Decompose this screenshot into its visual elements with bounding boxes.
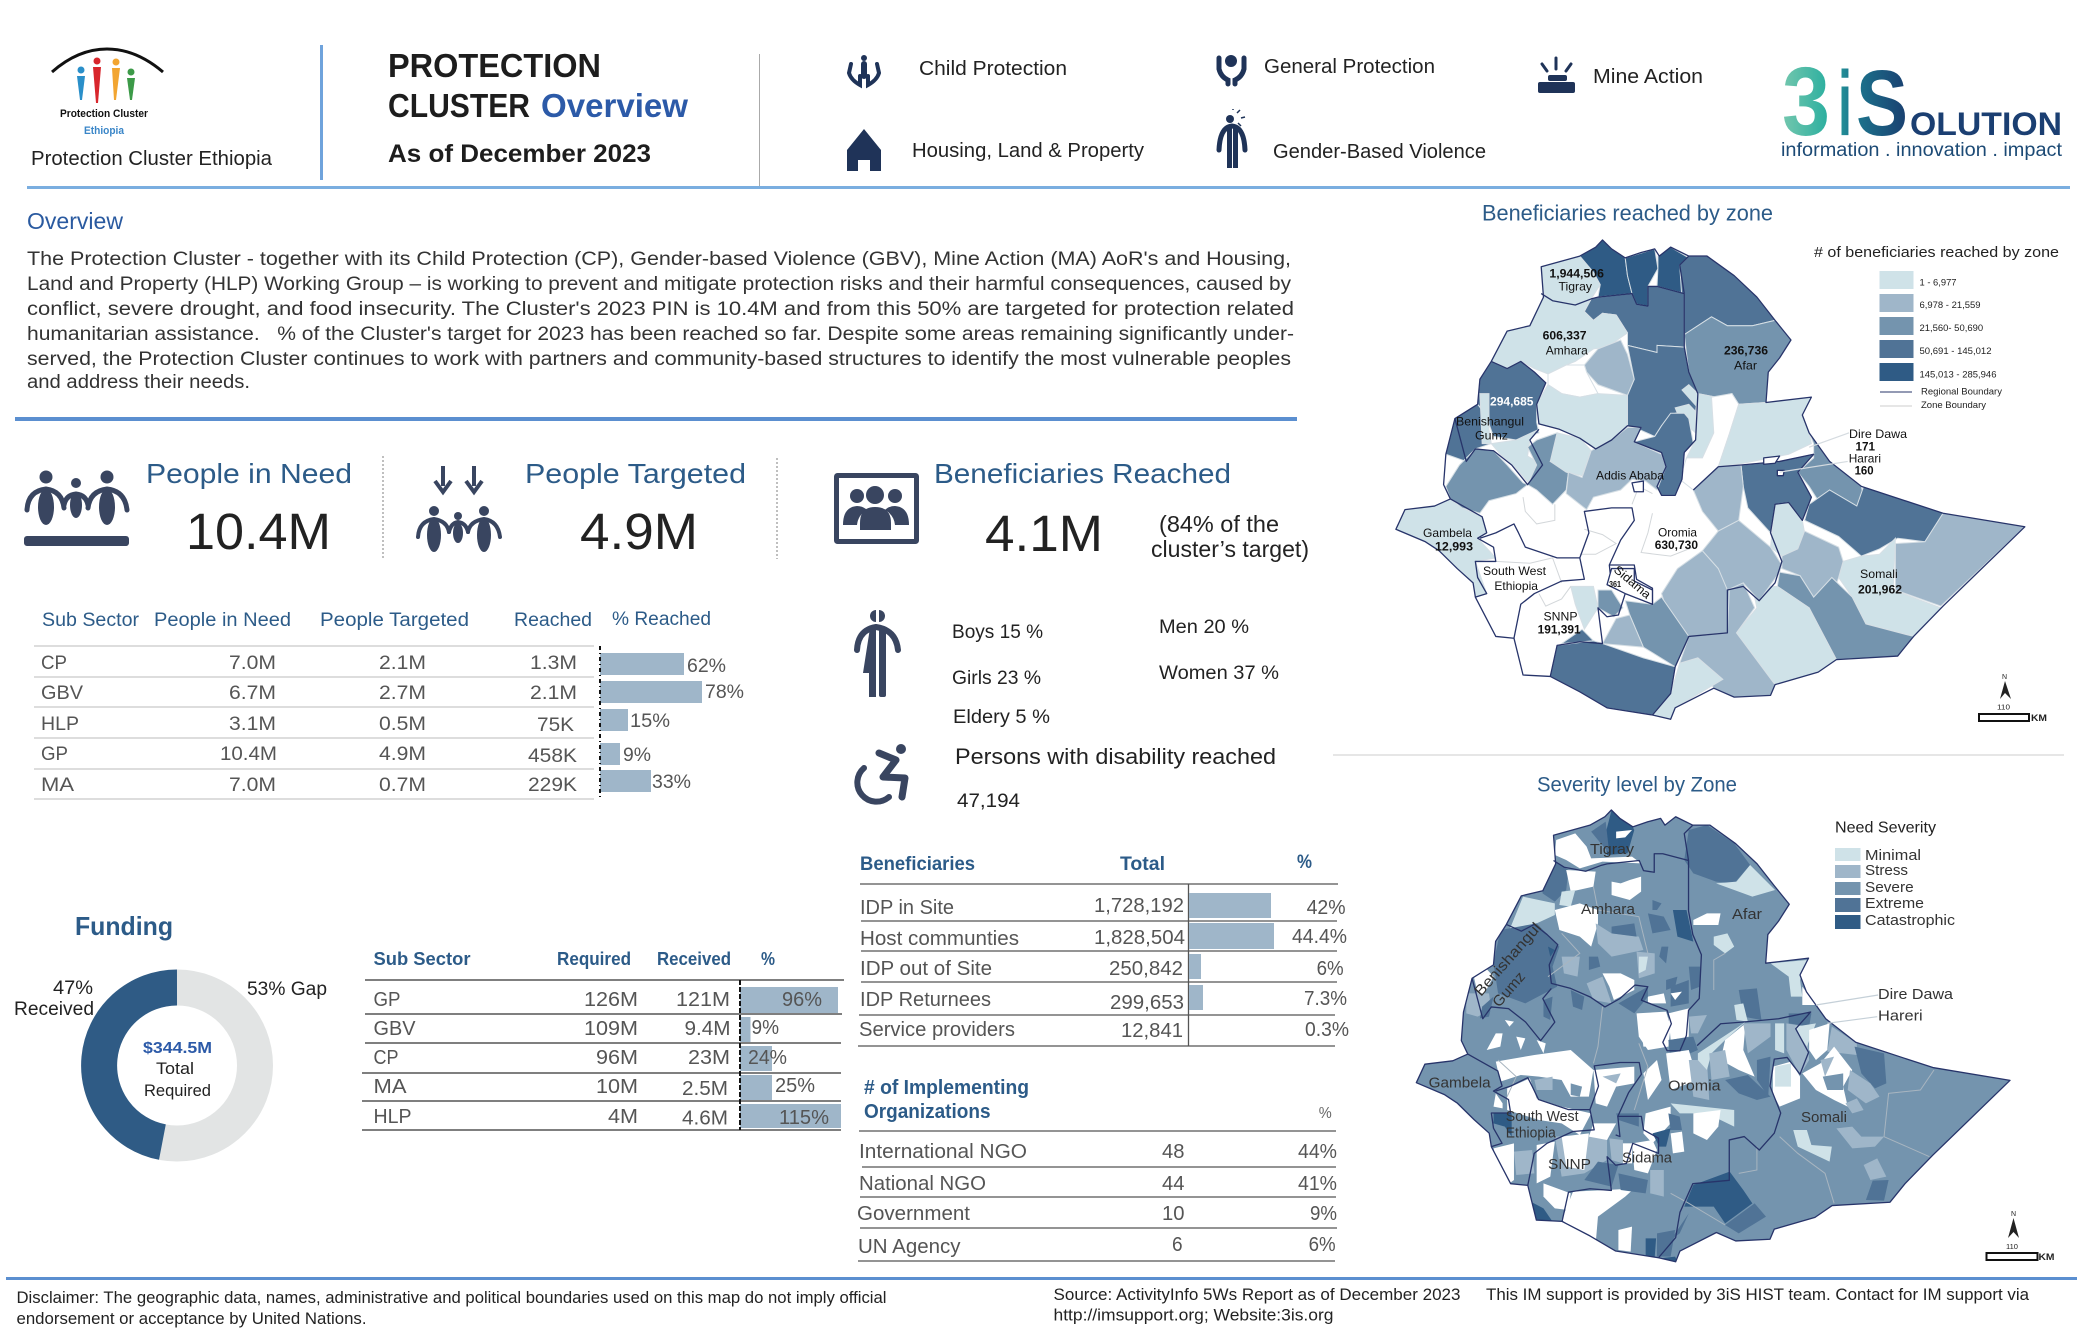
logo caption: Protection Cluster Ethiopia [31, 148, 273, 170]
rows: MA [41, 775, 74, 796]
icon: people targeted [418, 466, 500, 552]
map labels: Harari [1849, 452, 1881, 466]
map labels [1429, 841, 1954, 1173]
map labels: Amhara [1546, 343, 1588, 357]
map legend: 21,560- 50,690 [1920, 323, 1983, 333]
map labels: Gambela [1423, 526, 1472, 540]
map labels: Tigray [1558, 280, 1592, 294]
header row: Beneficiaries [860, 854, 975, 875]
map legend: 50,691 - 145,012 [1920, 346, 1992, 356]
rows: 10M [596, 1076, 638, 1098]
rows: 109M [584, 1018, 638, 1040]
scale bar and north arrow: KM [2038, 1252, 2054, 1262]
icon: people in need [24, 470, 129, 546]
footer [6, 1277, 2077, 1328]
icon: gender figure [857, 610, 898, 697]
overview paragraph: humanitarian assistance. % of the Cluster's target for 2023 has been reached so far. Despite some areas remaining significantly under- [27, 324, 1294, 345]
title: CLUSTER [388, 87, 530, 124]
map labels: 606,337 [1543, 328, 1587, 342]
header: # of Implementing [864, 1077, 1029, 1099]
map labels: Dire Dawa [1878, 986, 1954, 1003]
header row: Received [657, 949, 731, 969]
header row: Sub Sector [374, 949, 470, 969]
rows: 48 [1162, 1141, 1184, 1163]
overview paragraph [27, 249, 1294, 393]
map labels: SNNP [1544, 609, 1578, 623]
logo: 3iS Solution: OLUTION [1910, 106, 2062, 142]
header band [27, 45, 2070, 189]
map legend [1835, 820, 1956, 929]
value: 10.4M: 10.4M [186, 503, 331, 560]
value: 4.1M: 4.1M [985, 505, 1103, 562]
disclaimer: Disclaimer: The geographic data, names, administrative and political boundaries used on this map do not imply official [16, 1289, 886, 1307]
rows: 25% [775, 1075, 815, 1097]
map labels: 1,944,506 [1549, 266, 1604, 280]
map labels: 201,962 [1858, 583, 1902, 597]
rows: 24% [748, 1047, 787, 1069]
label: Child Protection: Child Protection [919, 58, 1067, 80]
rows: 6 [1172, 1234, 1183, 1256]
note: share of target [1151, 511, 1309, 562]
rows: 75K [537, 715, 574, 736]
value: 47,194: 47,194 [957, 791, 1020, 812]
rows: 1.3M [530, 653, 577, 674]
rows: 6% [1317, 958, 1344, 980]
icon: beneficiaries frame [836, 476, 916, 542]
percent column header: % [1319, 1105, 1332, 1122]
scale bar and north arrow: KM [2031, 713, 2047, 723]
rows: 12,841 [1121, 1020, 1183, 1042]
label: Housing, Land & Property: Housing, Land & Property [912, 140, 1144, 162]
disclaimer: endorsement or acceptance by United Nations. [16, 1310, 366, 1328]
label: Mine Action: Mine Action [1593, 66, 1703, 88]
map labels: Benishangul [1456, 415, 1524, 429]
header row: People Targeted [320, 610, 469, 631]
donut chart: $344.5M [143, 1040, 212, 1057]
logo: 3iS Solution: i [1838, 53, 1852, 155]
rows: 3.1M [229, 714, 276, 735]
rows: 10.4M [220, 744, 277, 765]
map labels: Sidama [1611, 563, 1654, 602]
icon: child protection [849, 55, 879, 85]
header [864, 1077, 1029, 1123]
logo: Protection Cluster Ethiopia [52, 49, 163, 137]
rows: 0.3% [1305, 1019, 1349, 1041]
panel: severity map [1380, 774, 2061, 1277]
map legend: 6,978 - 21,559 [1920, 300, 1980, 310]
map legend: Extreme [1865, 895, 1924, 912]
rows: UN Agency [858, 1236, 960, 1258]
map labels: South West [1483, 564, 1547, 578]
map labels: Sidama [1622, 1150, 1673, 1167]
header row: Required [557, 949, 631, 969]
map legend: Zone Boundary [1921, 400, 1987, 410]
map legend: Stress [1865, 862, 1908, 879]
rows: 44% [1298, 1141, 1337, 1163]
map labels: Afar [1734, 358, 1757, 372]
bar chart: beneficiaries share [1189, 893, 1274, 1010]
rows: 9.4M [684, 1018, 730, 1040]
rows: 229K [528, 775, 577, 796]
logo: 3iS Solution: S [1856, 51, 1908, 155]
overview paragraph: conflict, severe drought, and food insecurity. The Cluster's 2023 PIN is 10.4M and from this 50% are targeted for protection related [27, 299, 1294, 320]
panel: KPI people targeted [418, 458, 746, 560]
note: share of target: cluster’s target) [1151, 536, 1309, 562]
map labels: 630,730 [1655, 538, 1698, 552]
logo: Protection Cluster Ethiopia: Ethiopia [84, 125, 125, 137]
source: Source: ActivityInfo 5Ws Report as of December 2023 [1054, 1286, 1460, 1304]
scale bar and north arrow: 110 [2006, 1244, 2018, 1251]
rows: 7.0M [229, 653, 276, 674]
heading: severity map: Severity level by Zone [1537, 774, 1737, 797]
rows: 2.1M [530, 683, 577, 704]
rows: Host communties [860, 928, 1019, 950]
scale bar and north arrow: N [2011, 1211, 2016, 1218]
overview paragraph: served, the Protection Cluster continues to work with partners and community-based structures to identify the most vulnerable peoples [27, 349, 1291, 370]
title: As of December 2023 [388, 140, 651, 168]
rows: 115% [779, 1107, 829, 1129]
map legend: Severe [1865, 879, 1914, 896]
source: http://imsupport.org; Website:3is.org [1054, 1307, 1334, 1325]
rows: 0.7M [379, 775, 426, 796]
note: share of target: (84% of the [1159, 511, 1279, 537]
header row: Sub Sector [42, 610, 140, 631]
header row: % [761, 949, 775, 969]
rows: 6% [1309, 1234, 1336, 1256]
scale bar and north arrow [1986, 1211, 2054, 1262]
bar chart: percent reached: 33% [652, 772, 691, 793]
rows: Service providers [859, 1019, 1015, 1041]
choropleth map: severity by zone [1416, 809, 2011, 1262]
donut labels [14, 978, 327, 1020]
rows: GP [41, 744, 68, 765]
map labels: 12,993 [1435, 540, 1473, 554]
logo: Protection Cluster Ethiopia: Protection Cluster [60, 108, 149, 120]
panel: demographics [857, 610, 1279, 812]
header row [374, 949, 775, 969]
bar chart: percent received [740, 980, 841, 1130]
icon: housing [847, 129, 881, 171]
map labels: Dire Dawa [1849, 427, 1907, 441]
rows: 23M [688, 1047, 730, 1069]
header row: Reached [514, 610, 592, 631]
map labels [1423, 266, 1907, 637]
icon: wheelchair [857, 744, 906, 802]
rows: 4.9M [379, 744, 426, 765]
overview paragraph: Land and Property (HLP) Working Group – is working to prevent and mitigate protection risks and their harmful consequences, caused by [27, 274, 1292, 295]
rows: MA [374, 1076, 407, 1098]
rows: 9% [1310, 1203, 1337, 1225]
rows: National NGO [859, 1173, 986, 1195]
rows: 41% [1298, 1173, 1337, 1195]
rows [857, 1141, 1337, 1258]
scale bar and north arrow: 110 [1997, 705, 2010, 712]
map labels: Hareri [1878, 1008, 1923, 1025]
choropleth map: beneficiaries by zone [1395, 239, 2026, 720]
source [1054, 1286, 1460, 1325]
rows: CP [41, 653, 67, 674]
bar chart: percent reached [600, 646, 744, 800]
logo: 3iS Solution [1781, 47, 2063, 161]
map labels: Gambela [1429, 1075, 1491, 1092]
rows: 0.5M [379, 714, 426, 735]
header row [42, 609, 711, 631]
rows: 7.0M [229, 775, 276, 796]
map labels: 171 [1856, 440, 1875, 454]
icon: gender-based violence [1219, 109, 1245, 168]
heading: people in need: People in Need [146, 458, 352, 489]
title [388, 47, 688, 168]
rows: 2.5M [682, 1078, 728, 1100]
rows: 4M [608, 1106, 638, 1128]
header row: People in Need [154, 610, 291, 631]
rows: 96M [596, 1047, 638, 1069]
scale bar and north arrow: N [2002, 674, 2007, 681]
map labels: Benishangul [1471, 919, 1545, 1000]
donut labels: 47% [53, 978, 93, 999]
map labels: Ethiopia [1506, 1125, 1556, 1142]
header: Organizations [864, 1101, 990, 1123]
value: 4.9M: 4.9M [580, 503, 698, 560]
map labels: 236,736 [1724, 343, 1768, 357]
rows: 7.3% [1304, 988, 1347, 1010]
map legend: Minimal [1865, 847, 1921, 864]
rows: HLP [374, 1106, 412, 1128]
header row: Total [1120, 854, 1165, 875]
gender breakdown: Men 20 % [1159, 617, 1249, 638]
disclaimer [16, 1289, 886, 1328]
rows: GP [374, 989, 400, 1011]
scale bar and north arrow [1979, 674, 2047, 723]
logo: 3iS Solution: 3 [1782, 47, 1830, 156]
map labels: Gumz [1475, 428, 1508, 442]
map labels: Afar [1732, 906, 1762, 923]
map labels: Amhara [1581, 901, 1636, 918]
donut chart: Total [156, 1059, 194, 1078]
map labels: Oromia [1668, 1078, 1721, 1095]
table: funding by sub sector [362, 949, 844, 1130]
rows: 96% [782, 989, 822, 1011]
map labels: 294,685 [1490, 394, 1534, 408]
bar chart: percent reached: 78% [705, 682, 744, 703]
table: implementing organizations [857, 1077, 1337, 1261]
header row: % [1297, 852, 1312, 873]
rows: 121M [676, 989, 730, 1011]
gender breakdown [952, 617, 1279, 728]
bar chart: percent reached: 9% [623, 745, 651, 766]
rows: GBV [374, 1018, 416, 1040]
table: beneficiaries [858, 852, 1349, 1046]
rows [374, 989, 829, 1130]
rows: 458K [528, 746, 577, 767]
bar chart: percent reached: 62% [687, 656, 726, 677]
heading: beneficiaries map: Beneficiaries reached by zone [1482, 200, 1773, 225]
IM support note: This IM support is provided by 3iS HIST team. Contact for IM support via [1486, 1286, 2030, 1304]
rows: 1,728,192 [1094, 895, 1184, 917]
rows: 2.7M [379, 683, 426, 704]
gender breakdown: Eldery 5 % [953, 707, 1050, 728]
rows [41, 653, 577, 796]
heading: people targeted: People Targeted [525, 458, 746, 489]
panel: beneficiaries map [1380, 200, 2061, 733]
map labels: Gumz [1489, 969, 1529, 1011]
rows: 44 [1162, 1173, 1184, 1195]
gender breakdown: Boys 15 % [952, 622, 1043, 643]
map legend: Catastrophic [1865, 912, 1956, 929]
donut chart: Required [144, 1081, 211, 1100]
heading: overview: Overview [27, 208, 123, 234]
map labels: Somali [1860, 567, 1898, 581]
label: Gender-Based Violence: Gender-Based Violence [1273, 141, 1486, 163]
title: PROTECTION [388, 47, 601, 84]
rows: 126M [584, 989, 638, 1011]
icon: mine action [1538, 58, 1575, 93]
donut chart [99, 988, 255, 1144]
rows: HLP [41, 714, 79, 735]
map labels: 191,391 [1538, 623, 1581, 637]
heading: funding: Funding [75, 911, 173, 941]
gender breakdown: Women 37 % [1159, 663, 1279, 684]
rows: 299,653 [1110, 992, 1184, 1014]
donut labels: Received [14, 999, 94, 1020]
disability reached: Persons with disability reached [955, 744, 1276, 769]
donut labels: 53% Gap [247, 979, 327, 1000]
rows: 4.6M [682, 1108, 728, 1130]
panel: KPI beneficiaries reached [836, 458, 1309, 562]
rows: GBV [41, 683, 83, 704]
rows: 2.1M [379, 653, 426, 674]
rows: IDP out of Site [860, 958, 992, 980]
title: Overview [541, 87, 688, 124]
map legend [1814, 244, 2059, 410]
rows: 42% [1307, 897, 1346, 919]
map labels: 361 [1609, 580, 1621, 589]
rows: CP [374, 1047, 398, 1069]
map labels: SNNP [1548, 1156, 1591, 1173]
map labels: Addis Ababa [1596, 468, 1664, 482]
bar chart: percent reached: 15% [630, 711, 670, 732]
logo: 3iS Solution: information . innovation . impact [1781, 140, 2063, 161]
map labels: Ethiopia [1494, 579, 1538, 593]
map labels: 160 [1855, 464, 1874, 478]
map legend: Need Severity [1835, 820, 1936, 837]
rows: Government [857, 1203, 970, 1225]
map legend: 1 - 6,977 [1920, 277, 1956, 287]
gender breakdown: Girls 23 % [952, 668, 1041, 689]
map legend: 145,013 - 285,946 [1920, 370, 1996, 380]
rows: 250,842 [1109, 958, 1183, 980]
rows: IDP Returnees [860, 989, 991, 1011]
label: General Protection: General Protection [1264, 56, 1435, 78]
map labels: Tigray [1590, 841, 1635, 858]
rows: 1,828,504 [1094, 927, 1185, 949]
panel: overview [15, 208, 1297, 421]
panel: funding [14, 911, 327, 1144]
rows: 10 [1162, 1203, 1184, 1225]
map legend: Regional Boundary [1921, 387, 2003, 397]
overview paragraph: and address their needs. [27, 372, 250, 393]
map labels: Somali [1801, 1109, 1847, 1126]
rows: 6.7M [229, 683, 276, 704]
header row: % Reached [612, 609, 711, 630]
rows: IDP in Site [860, 897, 954, 919]
rows: International NGO [859, 1141, 1027, 1163]
map labels: South West [1506, 1108, 1579, 1125]
panel: KPI people in need [24, 458, 352, 560]
overview paragraph: The Protection Cluster - together with its Child Protection (CP), Gender-based Violence (GBV), Mine Action (MA) AoR's and Housing, [27, 249, 1291, 270]
rows: 9% [752, 1017, 779, 1039]
table: sub sector reach [34, 609, 744, 800]
header row [860, 852, 1312, 875]
heading: beneficiaries reached: Beneficiaries Reached [934, 458, 1231, 489]
rows [859, 895, 1349, 1042]
rows: 44.4% [1292, 926, 1347, 948]
icon: general protection [1219, 55, 1244, 84]
map legend: # of beneficiaries reached by zone [1814, 244, 2059, 261]
map labels: Oromia [1658, 525, 1697, 539]
